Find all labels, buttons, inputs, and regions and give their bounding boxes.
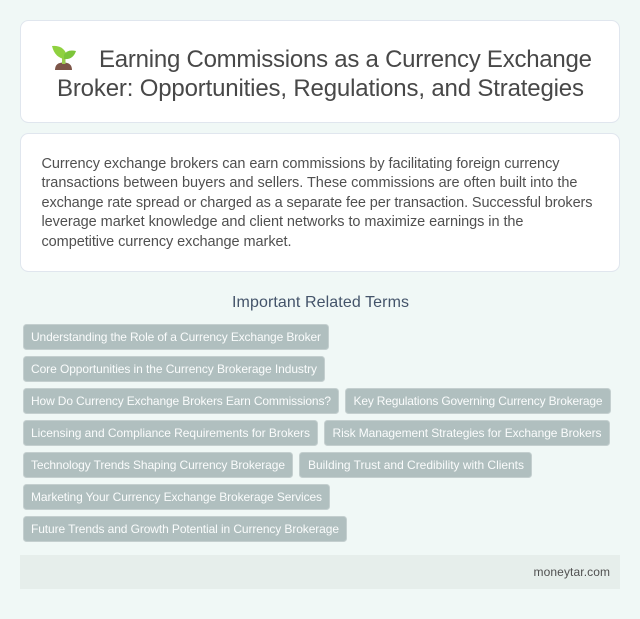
tag [324, 420, 610, 446]
icon: seedling [52, 46, 76, 70]
tag [24, 420, 318, 446]
tag: Key Regulations Governing Currency Brokerage [354, 394, 603, 408]
footer bar: moneytar.com [534, 565, 610, 579]
title text [57, 46, 592, 102]
tag: Understanding the Role of a Currency Exchange Broker [31, 330, 321, 344]
panel: introduction paragraph: Currency exchange brokers can earn commissions by facilitating foreign currency [42, 156, 560, 172]
tag [24, 452, 292, 478]
tag [24, 324, 328, 350]
heading: important related terms: Important Related Terms [232, 294, 409, 311]
tag: Building Trust and Credibility with Clients [308, 458, 524, 472]
panel: introduction paragraph: competitive currency exchange market. [42, 234, 292, 250]
panel: introduction paragraph: exchange rate spread or charged as a separate fee per transaction. Successful brokers [42, 195, 592, 211]
panel: introduction paragraph [20, 134, 620, 272]
tag [24, 356, 324, 382]
tag: Core Opportunities in the Currency Brokerage Industry [31, 362, 317, 376]
panel: related term tags [24, 324, 610, 542]
tag [300, 452, 532, 478]
tag [24, 484, 330, 510]
tag [24, 388, 338, 414]
panel: introduction paragraph: leverage market knowledge and client networks to maximize earnings in the [42, 214, 524, 230]
footer bar [20, 555, 620, 589]
panel: title card [20, 20, 620, 122]
tag: Future Trends and Growth Potential in Currency Brokerage [31, 522, 339, 536]
title text: Earning Commissions as a Currency Exchange [99, 46, 592, 73]
title text: Broker: Opportunities, Regulations, and Strategies [57, 75, 584, 102]
tag: Marketing Your Currency Exchange Brokerage Services [31, 490, 322, 504]
panel: introduction paragraph: transactions between buyers and sellers. These commissions are often built into the [42, 175, 578, 191]
tag: Technology Trends Shaping Currency Brokerage [31, 458, 285, 472]
tag: Licensing and Compliance Requirements for Brokers [31, 426, 310, 440]
tag: Risk Management Strategies for Exchange Brokers [332, 426, 602, 440]
tag [346, 388, 610, 414]
tag [24, 516, 346, 542]
tag: How Do Currency Exchange Brokers Earn Commissions? [31, 394, 331, 408]
